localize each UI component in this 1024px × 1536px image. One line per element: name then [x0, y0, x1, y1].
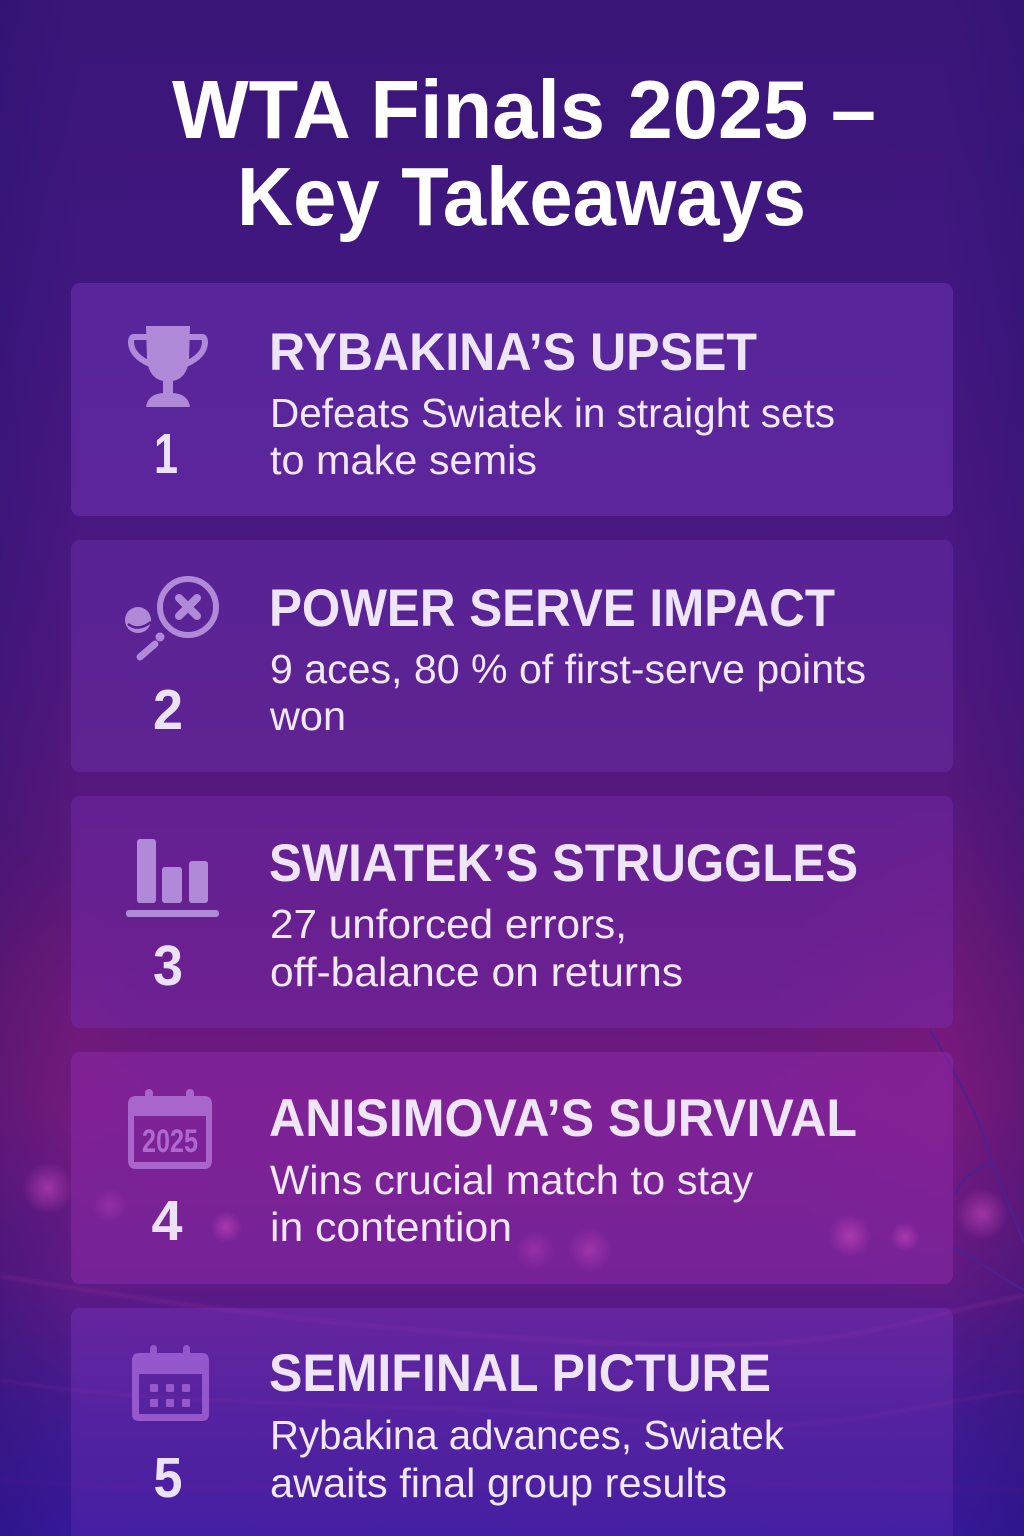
description: awaits final group results [270, 1460, 727, 1506]
title: Key Takeaways [237, 150, 806, 243]
description: off-balance on returns [270, 949, 683, 995]
panel: semifinal picture [71, 1308, 953, 1536]
description: to make semis [270, 437, 537, 483]
heading: POWER SERVE IMPACT [269, 579, 835, 638]
icon: 2025 calendar: 2025 [142, 1123, 198, 1159]
number 3: 3 [153, 934, 183, 998]
description [270, 1157, 754, 1250]
icon: 2025 calendar [128, 1089, 212, 1169]
number 5: 5 [154, 1446, 182, 1510]
description [270, 1412, 784, 1506]
number 4: 4 [152, 1189, 183, 1253]
panel: Rybakina's upset [71, 283, 953, 516]
panel: power serve impact [71, 540, 953, 772]
icon: bar chart [126, 839, 219, 917]
description: 27 unforced errors, [270, 901, 627, 947]
description [270, 390, 835, 483]
heading: RYBAKINA’S UPSET [269, 323, 757, 382]
description: 9 aces, 80 % of first-serve points [270, 646, 866, 692]
number 1: 1 [154, 422, 178, 486]
heading: ANISIMOVA’S SURVIVAL [269, 1089, 857, 1148]
number 2: 2 [153, 678, 183, 742]
title [172, 63, 876, 243]
description: won [269, 693, 346, 739]
glow lights [210, 1211, 920, 1272]
description [269, 646, 866, 739]
description [270, 901, 683, 995]
icon: trophy [131, 326, 205, 407]
panel: Anisimova's survival [71, 1052, 953, 1284]
description: in contention [270, 1204, 512, 1250]
icon: racket and ball [125, 579, 216, 657]
description: Defeats Swiatek in straight sets [270, 390, 835, 436]
heading: SEMIFINAL PICTURE [269, 1344, 771, 1403]
panel: Swiatek's struggles [71, 796, 953, 1028]
heading: SWIATEK’S STRUGGLES [269, 834, 858, 893]
description: Rybakina advances, Swiatek [270, 1412, 784, 1458]
title: WTA Finals 2025 – [172, 63, 876, 156]
description: Wins crucial match to stay [270, 1157, 754, 1203]
icon: calendar [132, 1345, 209, 1421]
